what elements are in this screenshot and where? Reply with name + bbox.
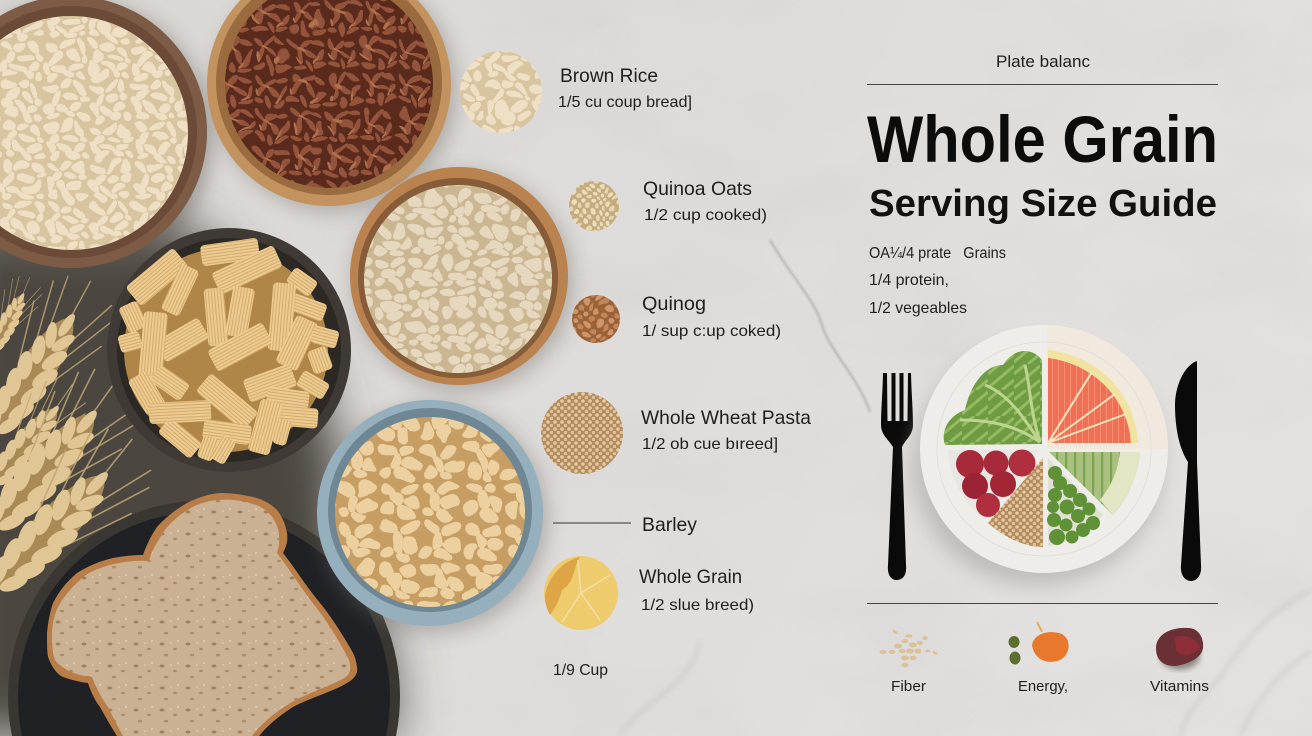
shaded dark area under left food bbox=[0, 225, 400, 736]
bowl: red rice bbox=[207, 0, 457, 212]
icon: grains bbox=[880, 629, 938, 667]
label: whole grain: 1/2 slue breed) bbox=[641, 597, 754, 614]
plate proportions text: 1/4 protein, bbox=[869, 272, 949, 289]
benefit: energy: Energy, bbox=[1018, 678, 1068, 695]
label: whole wheat pasta: Whole Wheat Pasta bbox=[641, 407, 811, 429]
kicker: Plate balanc bbox=[996, 52, 1090, 71]
plate diagram bbox=[913, 325, 1168, 586]
swatch: whole grain bbox=[544, 556, 618, 630]
label: whole grain bbox=[639, 566, 754, 614]
label: brown rice: 1/5 cu coup bread] bbox=[558, 94, 692, 111]
label: quinoa oats: Quinoa Oats bbox=[643, 178, 752, 200]
bowl: brown rice bbox=[0, 0, 212, 275]
benefit: energy bbox=[1008, 622, 1069, 695]
label: quinoa oats: 1/2 cup cooked) bbox=[644, 207, 767, 224]
label: quinoa: Quinog bbox=[642, 293, 706, 315]
swatch: brown rice bbox=[460, 51, 542, 133]
icon: knife bbox=[1175, 361, 1201, 581]
icon: fork bbox=[881, 373, 913, 580]
bread slice bbox=[47, 493, 357, 736]
icon: dark berry bbox=[1156, 628, 1203, 670]
quadrant: peas bbox=[1047, 458, 1103, 546]
icon: peas and carrot bbox=[1008, 622, 1069, 664]
quadrant: salmon bbox=[1048, 350, 1138, 443]
benefit: vitamins: Vitamins bbox=[1150, 678, 1209, 695]
pasta pieces bbox=[117, 238, 340, 465]
quadrant: cucumber bbox=[1049, 452, 1140, 515]
label: barley: Barley bbox=[642, 514, 697, 536]
swatch: whole wheat pasta bbox=[541, 392, 623, 474]
bowl: rolled oats bbox=[350, 167, 573, 392]
benefit: vitamins bbox=[1150, 628, 1209, 695]
label: quinoa bbox=[642, 293, 781, 340]
bowl: pasta bbox=[107, 228, 351, 472]
title: Serving Size Guide bbox=[869, 183, 1217, 225]
label: whole grain: Whole Grain bbox=[639, 566, 742, 588]
label: quinoa: 1/ sup c:up coked) bbox=[642, 323, 781, 340]
black plate bbox=[8, 501, 400, 736]
label: brown rice: Brown Rice bbox=[560, 65, 658, 87]
swatch: quinoa bbox=[572, 295, 620, 343]
label: whole wheat pasta: 1/2 ob cue bıreed] bbox=[642, 436, 778, 453]
benefit: fiber bbox=[880, 629, 938, 695]
quadrant: lettuce bbox=[944, 351, 1042, 445]
plate proportions text: 1/2 vegeables bbox=[869, 300, 967, 317]
bowl: golden oats bbox=[317, 400, 548, 632]
label: brown rice bbox=[558, 65, 692, 111]
wheat stalks bbox=[0, 261, 169, 620]
title bbox=[867, 102, 1218, 225]
label: whole wheat pasta bbox=[641, 407, 811, 453]
plate proportions text bbox=[869, 245, 1006, 317]
plate proportions text: OA¼/4 prate Grains bbox=[869, 245, 1006, 262]
swatch: quinoa oats bbox=[569, 181, 619, 231]
quadrant: quinoa bbox=[988, 458, 1043, 547]
label: one cup: 1/9 Cup bbox=[553, 662, 608, 679]
title: Whole Grain bbox=[867, 102, 1218, 176]
benefit: fiber: Fiber bbox=[891, 678, 926, 695]
quadrant: cherries bbox=[948, 450, 1040, 520]
label: quinoa oats bbox=[643, 178, 767, 224]
